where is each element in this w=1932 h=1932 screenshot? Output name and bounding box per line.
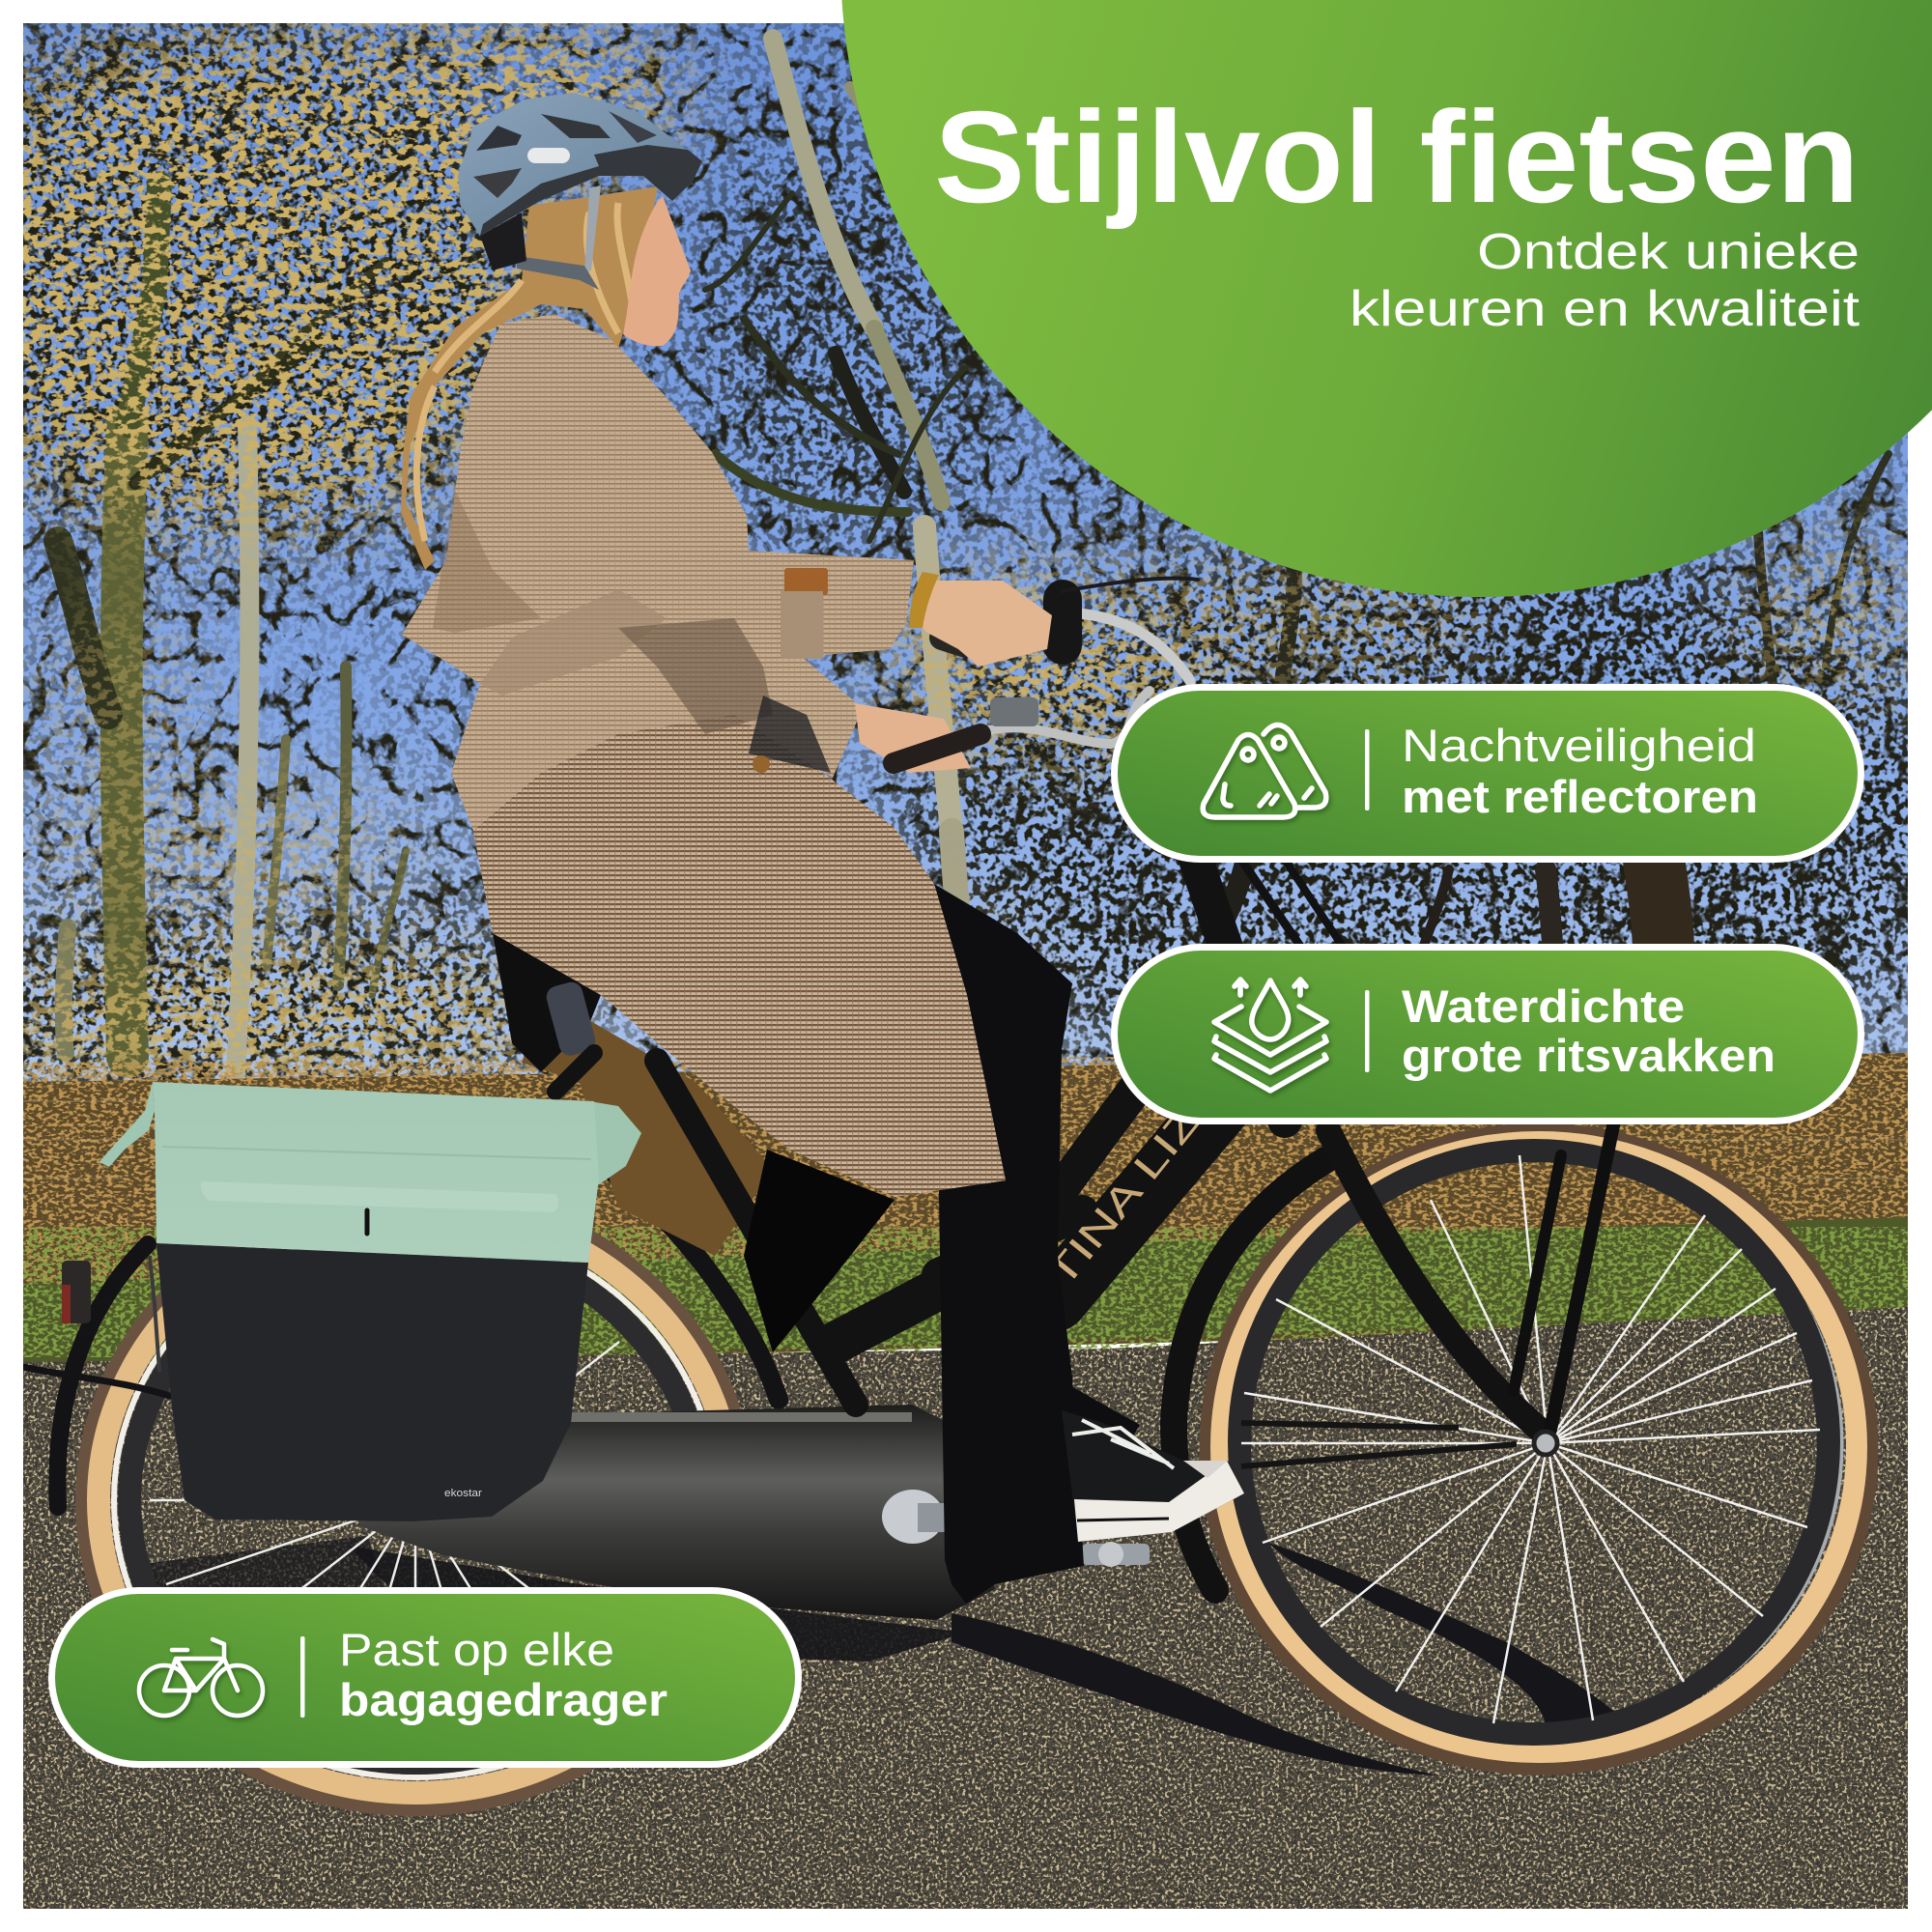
bicycle: rear mudguards: [23, 1169, 779, 1507]
person: hair: [401, 186, 658, 570]
tree trunks: [58, 39, 1889, 1072]
person: bracelets: [910, 572, 939, 628]
bicycle: saddle bag and under-saddle parts: [493, 933, 773, 1256]
title panel: green circle: [840, 0, 1932, 597]
photo background: trees and sky: [23, 23, 1908, 1182]
bicycle: handlebars: [894, 579, 1198, 763]
icon: water drop and layers: [1214, 980, 1326, 1091]
bicycle shadows on road: [135, 1536, 1628, 1776]
badge text: grote ritsvakken: [1402, 1030, 1776, 1081]
subtitle: [1350, 224, 1861, 337]
bicycle: front mudguard: [1174, 1160, 1325, 1590]
badge text: [1402, 720, 1758, 822]
badge text: Nachtveiligheid: [1402, 720, 1756, 771]
text: frame lettering: TINA LIZ!: [1039, 1088, 1218, 1295]
person: lower hand: [855, 703, 971, 773]
badge: waterproof zip compartments: [1115, 947, 1861, 1121]
icon: rear light: [62, 1261, 91, 1323]
bicycle: pedal: [1082, 1542, 1150, 1567]
icon: bicycle: [139, 1639, 263, 1716]
bicycle: chain case: [357, 1405, 995, 1620]
divider: [1365, 990, 1370, 1072]
badge: fits every luggage carrier: [52, 1590, 798, 1764]
person: hair highlights: [416, 203, 633, 541]
bicycle: front fork: [1328, 1125, 1613, 1455]
text: bag logo: ekostar: [444, 1488, 482, 1499]
divider: [300, 1636, 305, 1718]
person: far leg: [744, 1150, 895, 1352]
bicycle: front wheel: [1206, 1129, 1872, 1769]
product: pannier bag: [99, 1082, 641, 1521]
title: Stijlvol fietsen: [934, 84, 1860, 230]
subtitle: kleuren en kwaliteit: [1350, 281, 1861, 337]
road surface: [23, 1304, 1908, 1909]
badge text: met reflectoren: [1402, 771, 1758, 822]
person: shoe: [1062, 1410, 1244, 1542]
person: trouser hem: [1063, 1381, 1140, 1507]
bicycle: rear wheel: [82, 1191, 749, 1809]
divider: [1365, 729, 1370, 810]
badge text: bagagedrager: [339, 1674, 668, 1725]
subtitle: Ontdek unieke: [1477, 224, 1860, 280]
badge text: Past op elke: [339, 1624, 614, 1675]
badge: night safety with reflectors: [1115, 688, 1861, 860]
person: upper hand: [913, 581, 1052, 667]
badge text: [1402, 980, 1776, 1081]
person: face: [623, 196, 691, 346]
person: coat: [402, 314, 1006, 1197]
hedge and grass verge: [23, 1053, 1908, 1372]
bicycle: frame: [555, 860, 1343, 1405]
person: helmet: [458, 93, 702, 290]
person: trousers: [934, 884, 1084, 1604]
icon: reflectors: [1203, 724, 1326, 817]
badge text: Waterdichte: [1402, 980, 1685, 1032]
badge text: [339, 1624, 668, 1725]
